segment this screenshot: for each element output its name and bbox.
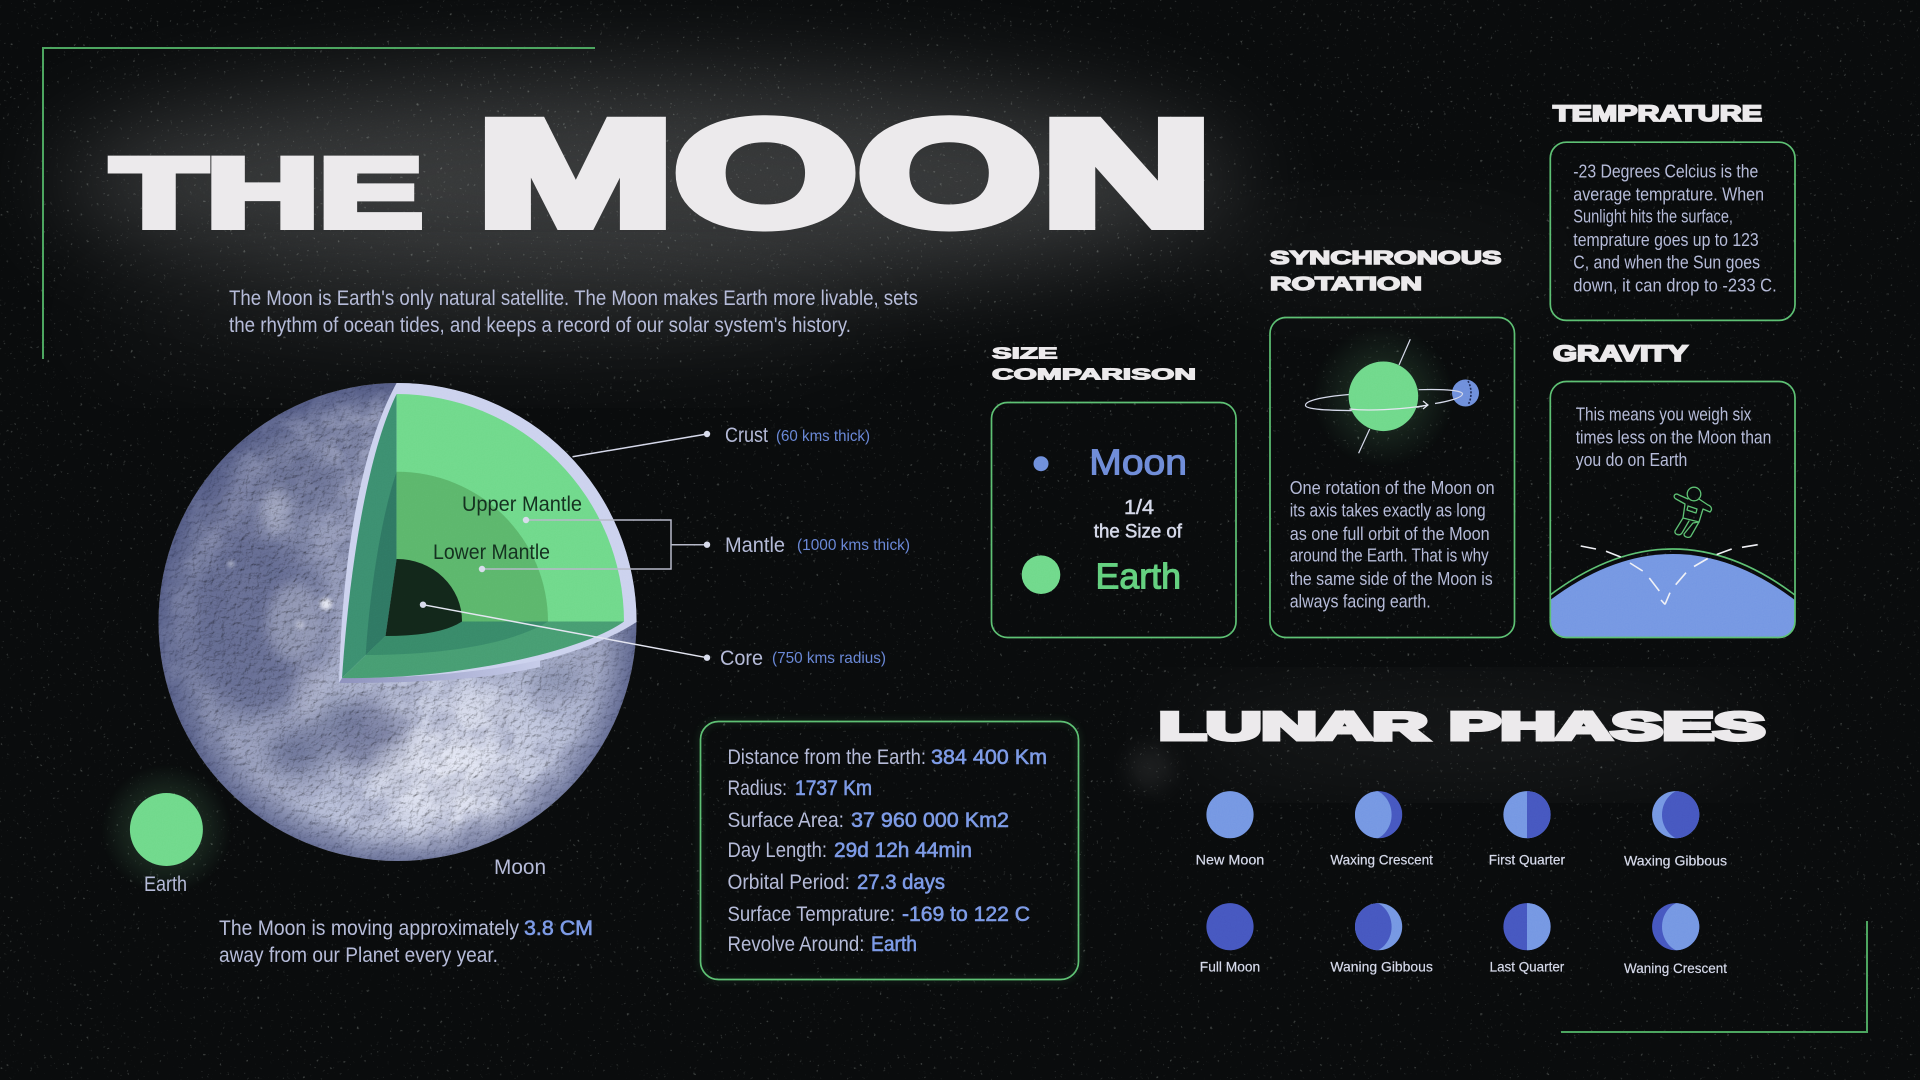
core — [386, 559, 462, 636]
intro text: The Moon is Earth's only natural satellite. The Moon makes Earth more livable, sets — [229, 287, 918, 310]
title: THE — [112, 138, 422, 248]
panel: synchronous rotation — [1270, 247, 1514, 638]
body text: -23 Degrees Celcius is the — [1573, 162, 1758, 182]
diagram: earth orbit with moon — [1305, 324, 1479, 468]
panel: lunar phases grid — [1196, 789, 1727, 976]
frame corner: bottom right — [1561, 921, 1867, 1032]
phase: new moon: New Moon — [1196, 852, 1264, 868]
body text — [1573, 162, 1777, 296]
panel: size comparison — [992, 346, 1236, 638]
phase: waning gibbous: Waning Gibbous — [1330, 959, 1433, 975]
body text: One rotation of the Moon on — [1290, 478, 1495, 498]
icon: astronaut — [1674, 487, 1711, 537]
label: core: (750 kms radius) — [772, 650, 886, 667]
label: core — [720, 647, 886, 670]
body text: its axis takes exactly as long — [1290, 501, 1486, 521]
icon: earth dot — [1022, 555, 1060, 594]
phase: last quarter: Last Quarter — [1490, 959, 1565, 975]
moving away note: 3.8 CM — [524, 917, 593, 940]
phase: waning crescent — [1624, 901, 1727, 976]
panel: moon facts: Revolve Around: — [728, 933, 864, 956]
panel: moon facts: Surface Temprature: — [728, 903, 895, 926]
comparison text: 1/4 — [1124, 497, 1154, 519]
body text: average temprature. When — [1573, 185, 1764, 205]
title — [112, 89, 1212, 257]
icon: moon dot — [1034, 456, 1048, 471]
left cut face inner band — [366, 472, 397, 655]
moving away note — [219, 917, 593, 967]
label: core: Core — [720, 647, 763, 670]
moving away note: The Moon is moving approximately — [219, 917, 519, 940]
phase: new moon — [1196, 791, 1264, 868]
panel: moon facts: 37 960 000 Km2 — [851, 809, 1009, 832]
phase: waxing crescent: Waxing Crescent — [1330, 852, 1433, 868]
heading: TEMPRATURE — [1553, 101, 1762, 126]
label: mantle: Mantle — [725, 534, 785, 557]
phase: waning crescent: Waning Crescent — [1624, 960, 1727, 976]
body text: temprature goes up to 123 — [1573, 230, 1759, 250]
panel: gravity — [1540, 341, 1805, 650]
crust — [339, 383, 637, 683]
label: lower mantle: Lower Mantle — [433, 541, 550, 564]
heading: SIZE — [992, 346, 1058, 362]
intro text — [229, 287, 918, 337]
title: MOON — [477, 89, 1212, 257]
heading: SYNCHRONOUS — [1270, 247, 1502, 268]
phase: waxing crescent — [1330, 789, 1433, 868]
comparison text: the Size of — [1094, 522, 1183, 543]
heading — [992, 346, 1196, 384]
panel: moon facts: Surface Area: — [728, 809, 844, 832]
phase: waxing gibbous — [1624, 789, 1727, 869]
label: moon: Moon — [494, 856, 546, 879]
panel: moon facts: 384 400 Km — [931, 746, 1047, 769]
body text: you do on Earth — [1576, 450, 1687, 470]
intro text: the rhythm of ocean tides, and keeps a record of our solar system's history. — [229, 314, 851, 337]
body text: Sunlight hits the surface, — [1573, 206, 1733, 226]
comparison text: Moon — [1089, 441, 1187, 482]
panel: temperature — [1550, 101, 1795, 320]
trajectory dashes — [1581, 545, 1758, 604]
body text: around the Earth. That is why — [1290, 546, 1489, 566]
phase: first quarter: First Quarter — [1489, 852, 1565, 868]
comparison text: Earth — [1096, 555, 1181, 596]
body text: C, and when the Sun goes — [1573, 252, 1760, 272]
label: crust: (60 kms thick) — [776, 428, 870, 445]
body text: times less on the Moon than — [1576, 428, 1771, 448]
body text: always facing earth. — [1290, 592, 1431, 612]
phase: first quarter — [1489, 791, 1565, 868]
label: crust — [725, 424, 870, 447]
moon surface arc — [1551, 548, 1794, 637]
left cut face — [342, 394, 397, 678]
body text: This means you weigh six — [1576, 404, 1751, 424]
panel: moon facts — [700, 722, 1078, 980]
heading: COMPARISON — [992, 366, 1196, 384]
body text — [1576, 404, 1771, 470]
phase: full moon: Full Moon — [1200, 959, 1260, 975]
floor cut face — [342, 622, 624, 678]
panel: moon facts: Distance from the Earth: — [728, 746, 926, 769]
label: mantle: (1000 kms thick) — [797, 537, 910, 554]
frame corner: top left — [43, 48, 595, 359]
heading: lunar phases: LUNAR PHASES — [1159, 706, 1765, 748]
panel: moon facts: Radius: — [728, 777, 787, 800]
heading — [1270, 247, 1502, 294]
panel: moon facts: -169 to 122 C — [902, 903, 1030, 926]
panel: moon facts: 1737 Km — [795, 777, 872, 800]
upper mantle face — [397, 394, 624, 622]
moon cross-section diagram — [158, 383, 638, 863]
phase: waning gibbous — [1330, 901, 1433, 975]
panel: moon facts: Earth — [871, 933, 917, 956]
floor inner band — [366, 622, 548, 655]
earth scale circle — [100, 764, 232, 896]
leader lines and layer labels — [420, 424, 910, 670]
body text: the same side of the Moon is — [1290, 569, 1493, 589]
label: upper mantle: Upper Mantle — [462, 493, 582, 516]
comparison text — [1089, 441, 1187, 596]
label: mantle — [725, 534, 910, 557]
phase: waxing gibbous: Waxing Gibbous — [1624, 853, 1727, 869]
label: crust: Crust — [725, 424, 768, 447]
heading: GRAVITY — [1553, 341, 1688, 366]
panel: moon facts: 29d 12h 44min — [834, 839, 972, 862]
body text: as one full orbit of the Moon — [1290, 524, 1490, 544]
lower mantle face — [397, 472, 548, 622]
phase: full moon — [1200, 903, 1260, 975]
body text — [1290, 478, 1495, 612]
moving away note: away from our Planet every year. — [219, 944, 498, 967]
panel: moon facts: 27.3 days — [857, 871, 945, 894]
earth scale circle: Earth — [144, 873, 187, 896]
moon surface — [158, 383, 638, 863]
heading: ROTATION — [1270, 273, 1422, 294]
phase: last quarter — [1490, 903, 1565, 975]
panel: moon facts: Day Length: — [728, 839, 827, 862]
body text: down, it can drop to -233 C. — [1573, 276, 1777, 296]
panel: moon facts: Orbital Period: — [728, 871, 850, 894]
